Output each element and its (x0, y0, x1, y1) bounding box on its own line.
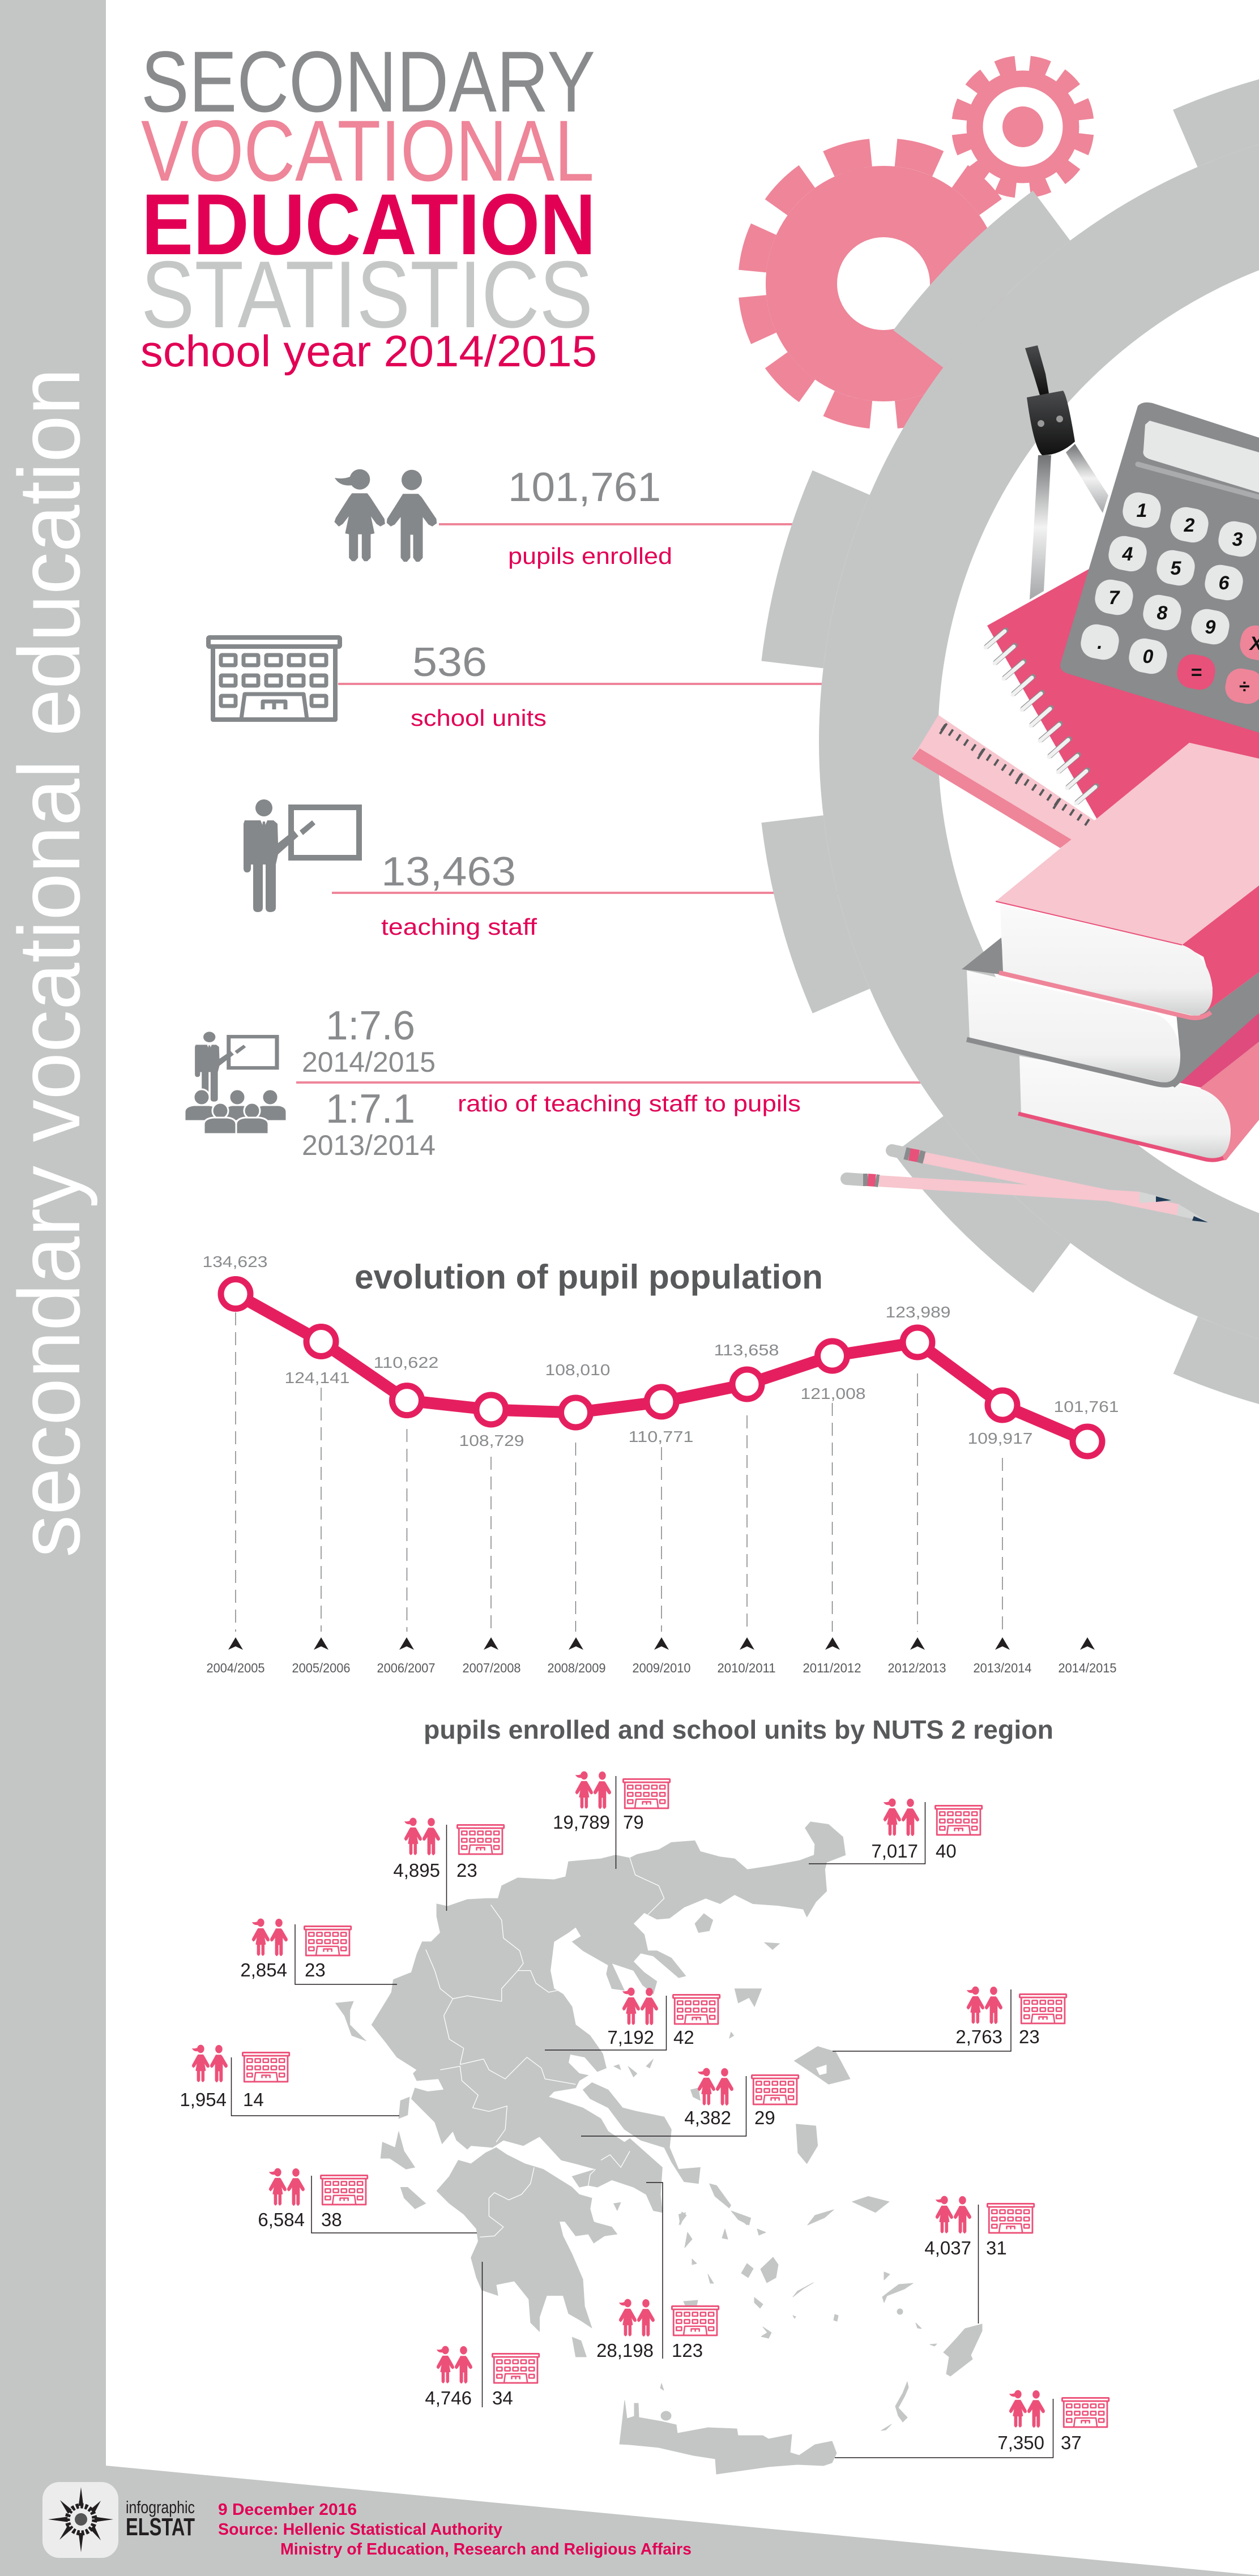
title: VOCATIONAL (141, 102, 594, 199)
line chart: evolution of pupil population: 113,658 (714, 1341, 779, 1359)
line chart: evolution of pupil population: 109,917 (967, 1430, 1033, 1447)
line chart: evolution of pupil population: 110,622 (374, 1354, 438, 1371)
line chart: evolution of pupil population: 2007/2008 (462, 1661, 521, 1675)
region: 19,789 pupils, 79 units (553, 1771, 670, 1869)
region: 7,192 pupils, 42 units (545, 1988, 720, 2050)
region: 4,746 pupils, 34 units: 34 (492, 2387, 513, 2408)
icon: ELSTAT logo (42, 2482, 118, 2558)
line chart: evolution of pupil population: 123,989 (886, 1303, 950, 1321)
region: 1,954 pupils, 14 units: 1,954 (180, 2089, 227, 2110)
stat: ratio of teaching staff to pupils: 1:7.6 (326, 1003, 415, 1049)
region: 19,789 pupils, 79 units: 79 (623, 1812, 644, 1833)
icon: calculator: = (1190, 662, 1202, 683)
region: 6,584 pupils, 38 units (258, 2168, 477, 2233)
line chart: evolution of pupil population: 2010/2011 (717, 1661, 776, 1675)
stat: ratio of teaching staff to pupils: 1:7.1 (326, 1086, 415, 1132)
title (140, 33, 597, 376)
line chart: evolution of pupil population: 101,761 (1053, 1398, 1119, 1415)
logo wordmark: ELSTAT (126, 2513, 195, 2541)
chart heading: evolution of pupil population (355, 1258, 823, 1296)
region: 2,763 pupils, 23 units: 2,763 (955, 2026, 1002, 2047)
region: 7,350 pupils, 37 units: 37 (1061, 2432, 1082, 2453)
region: 7,017 pupils, 40 units (809, 1799, 982, 1864)
stat: pupils enrolled: pupils enrolled (508, 543, 672, 569)
footer source text (218, 2501, 692, 2558)
icon: calculator: 5 (1171, 558, 1182, 579)
line chart: evolution of pupil population: 134,623 (203, 1253, 267, 1270)
region: 6,584 pupils, 38 units: 38 (321, 2209, 342, 2230)
stat: teaching staff (244, 799, 537, 940)
line chart: evolution of pupil population: 110,771 (629, 1428, 693, 1445)
stat: teaching staff: teaching staff (381, 914, 537, 940)
region: 2,854 pupils, 23 units (240, 1919, 397, 1984)
region: 7,350 pupils, 37 units (835, 2390, 1109, 2458)
icon: calculator: 1 (1137, 500, 1147, 521)
region: 7,192 pupils, 42 units: 7,192 (607, 2027, 654, 2048)
icon: pencils (847, 1150, 1208, 1222)
icon: stack of books (962, 743, 1259, 1162)
stat: teaching staff: 13,463 (381, 849, 516, 895)
line chart: evolution of pupil population: 2014/2015 (1058, 1661, 1117, 1675)
line chart: evolution of pupil population: 121,008 (801, 1385, 865, 1402)
region: 28,198 pupils, 123 units (596, 2183, 719, 2361)
logo wordmark (126, 2497, 195, 2541)
icon: calculator: 3 (1232, 529, 1243, 550)
icon: calculator (1060, 403, 1259, 733)
region: 7,350 pupils, 37 units: 7,350 (997, 2432, 1044, 2453)
region: 4,895 pupils, 23 units: 23 (456, 1860, 477, 1881)
line chart: evolution of pupil population: 124,141 (284, 1369, 350, 1387)
stat: ratio of teaching staff to pupils (185, 1003, 801, 1161)
region: 4,037 pupils, 31 units (924, 2196, 1034, 2323)
region: 4,895 pupils, 23 units: 4,895 (393, 1860, 440, 1881)
line chart: evolution of pupil population (203, 1253, 1119, 1675)
stat: ratio of teaching staff to pupils: 2014/2015 (302, 1046, 436, 1078)
map of Greece (335, 1822, 982, 2474)
line chart: evolution of pupil population: 2006/2007 (377, 1661, 435, 1675)
large grey gear (788, 85, 1259, 1398)
line chart: evolution of pupil population: 2011/2012 (803, 1661, 861, 1675)
line chart: evolution of pupil population: 2013/2014 (973, 1661, 1032, 1675)
bottom grey wedge (0, 2466, 1259, 2576)
region: 6,584 pupils, 38 units: 6,584 (258, 2209, 305, 2230)
region: 2,763 pupils, 23 units (833, 1987, 1066, 2051)
stat: school units: 536 (412, 640, 487, 685)
icon: calculator: 6 (1219, 572, 1230, 594)
logo wordmark: infographic (126, 2497, 195, 2517)
stat: ratio of teaching staff to pupils: ratio of teaching staff to pupils (458, 1090, 801, 1116)
icon: spiral notebook (985, 484, 1259, 819)
region: 4,382 pupils, 29 units: 29 (754, 2107, 775, 2128)
region: 4,037 pupils, 31 units: 31 (986, 2237, 1007, 2258)
title: EDUCATION (142, 176, 596, 273)
stat: school units (208, 637, 547, 731)
line chart: evolution of pupil population: 108,729 (459, 1432, 524, 1449)
title: STATISTICS (141, 241, 593, 348)
vertical sidebar title: secondary vocational education (1, 368, 98, 1557)
region: 28,198 pupils, 123 units: 123 (672, 2340, 703, 2361)
region: 7,192 pupils, 42 units: 42 (673, 2027, 694, 2048)
pink gears (752, 63, 1086, 416)
stat: pupils enrolled: 101,761 (508, 465, 661, 510)
title: school year 2014/2015 (140, 326, 597, 376)
region: 4,746 pupils, 34 units: 4,746 (425, 2387, 472, 2408)
footer source text: Ministry of Education, Research and Religious Affairs (280, 2540, 692, 2558)
icon: calculator: 9 (1205, 617, 1216, 638)
line chart: evolution of pupil population: 2008/2009 (547, 1661, 606, 1675)
region: 4,746 pupils, 34 units (425, 2262, 539, 2408)
region: 4,382 pupils, 29 units: 4,382 (684, 2107, 731, 2128)
icon: ruler (912, 715, 1097, 848)
region: 7,017 pupils, 40 units: 40 (936, 1841, 957, 1862)
region: 1,954 pupils, 14 units: 14 (243, 2089, 264, 2110)
footer source text: Source: Hellenic Statistical Authority (218, 2521, 502, 2539)
region: 19,789 pupils, 79 units: 19,789 (553, 1812, 610, 1833)
title: SECONDARY (141, 33, 595, 130)
map heading: pupils enrolled and school units by NUTS 2 region (424, 1715, 1053, 1744)
icon: calculator: . (1097, 632, 1103, 653)
footer source text: 9 December 2016 (218, 2501, 357, 2519)
stat: school units: school units (411, 705, 547, 731)
region: 2,854 pupils, 23 units: 2,854 (240, 1959, 287, 1980)
region: 4,037 pupils, 31 units: 4,037 (924, 2237, 971, 2258)
region: 28,198 pupils, 123 units: 28,198 (596, 2340, 654, 2361)
left grey sidebar (0, 0, 106, 2576)
region: 1,954 pupils, 14 units (180, 2045, 399, 2116)
line chart: evolution of pupil population: 2004/2005 (206, 1661, 265, 1675)
icon: calculator: 8 (1157, 602, 1168, 624)
line chart: evolution of pupil population: 2005/2006 (292, 1661, 350, 1675)
stat connector lines (296, 524, 961, 1082)
line chart: evolution of pupil population: 2009/2010 (632, 1661, 691, 1675)
region: 4,382 pupils, 29 units (581, 2068, 799, 2136)
icon: calculator: 0 (1143, 646, 1154, 667)
icon: calculator: 7 (1109, 587, 1121, 609)
line chart: evolution of pupil population: 2012/2013 (888, 1661, 946, 1675)
icon: calculator: ÷ (1239, 676, 1250, 698)
region: 2,763 pupils, 23 units: 23 (1019, 2026, 1040, 2047)
stat: pupils enrolled (335, 465, 672, 569)
stat: ratio of teaching staff to pupils: 2013/2014 (302, 1129, 436, 1161)
region: 2,854 pupils, 23 units: 23 (305, 1959, 326, 1980)
icon: compass (1025, 345, 1108, 600)
icon: calculator: 2 (1184, 515, 1195, 536)
region: 7,017 pupils, 40 units: 7,017 (871, 1841, 918, 1862)
icon: calculator: 4 (1122, 544, 1133, 565)
region: 4,895 pupils, 23 units (393, 1818, 504, 1911)
line chart: evolution of pupil population: 108,010 (545, 1361, 611, 1379)
